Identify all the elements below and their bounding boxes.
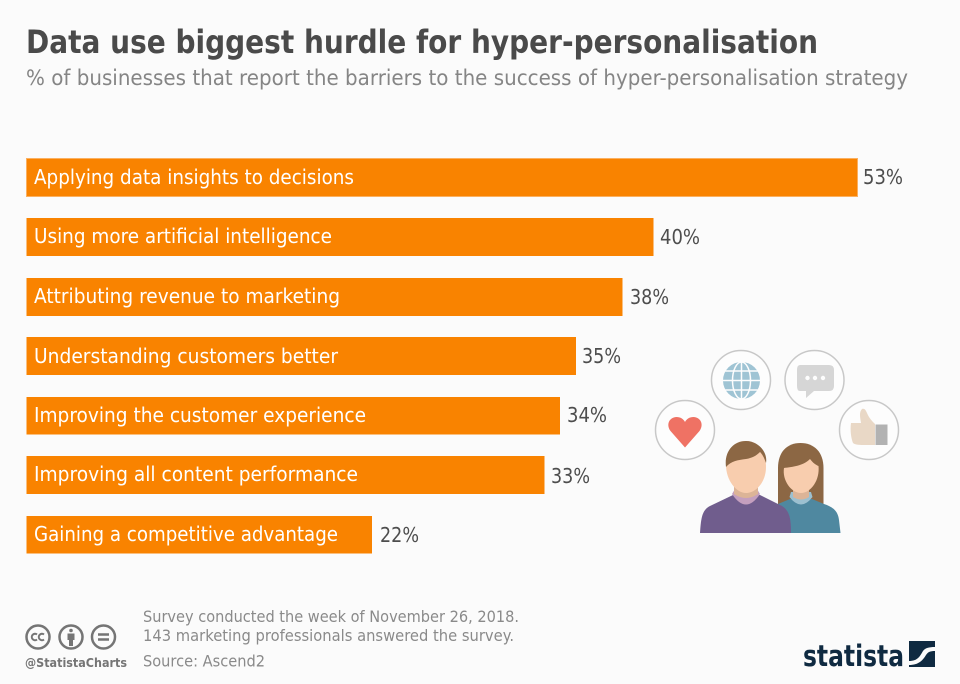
bar: applying data insights: 53%	[863, 165, 903, 189]
footnote	[143, 607, 519, 645]
footnote: 143 marketing professionals answered the survey.	[143, 626, 514, 645]
bar: understanding customers: Understanding customers better	[34, 344, 339, 368]
subtitle: % of businesses that report the barriers to the success of hyper-personalisation strategy	[26, 66, 908, 91]
source: Source: Ascend2	[143, 652, 265, 670]
handle: @StatistaCharts	[25, 655, 127, 670]
bar: content performance: 33%	[551, 464, 590, 488]
bar: content performance	[26, 456, 590, 494]
bar chart	[26, 158, 903, 554]
bar: attributing revenue: Attributing revenue to marketing	[34, 284, 340, 308]
icon: heart	[656, 400, 714, 460]
bar: attributing revenue: 38%	[630, 285, 669, 309]
bar: applying data insights	[26, 158, 903, 196]
bar: customer experience	[26, 397, 607, 434]
person: woman	[778, 443, 840, 533]
title: Data use biggest hurdle for hyper-personalisation	[26, 23, 818, 61]
bar: attributing revenue	[26, 278, 669, 316]
person: man	[700, 441, 791, 533]
bar: using more AI: Using more artificial intelligence	[34, 224, 332, 248]
bar: competitive advantage	[26, 516, 419, 554]
footnote: Survey conducted the week of November 26, 2018.	[143, 607, 519, 626]
illustration: people and icons	[656, 350, 898, 533]
bar: understanding customers: 35%	[582, 344, 621, 368]
icon: thumbs up	[840, 400, 898, 460]
icon: globe	[712, 350, 770, 410]
bar: using more AI	[26, 218, 700, 256]
bar: applying data insights: Applying data insights to decisions	[34, 165, 354, 189]
creative commons icons	[26, 626, 115, 648]
bar: competitive advantage: Gaining a competitive advantage	[34, 522, 338, 546]
icon: speech bubble	[785, 350, 844, 410]
statista logo: statista	[803, 639, 904, 673]
bar: content performance: Improving all content performance	[34, 462, 358, 486]
bar: competitive advantage: 22%	[380, 523, 419, 547]
bar: using more AI: 40%	[660, 225, 700, 249]
bar: customer experience: 34%	[567, 403, 607, 427]
bar: understanding customers	[26, 337, 621, 375]
bar: customer experience: Improving the customer experience	[34, 403, 366, 427]
